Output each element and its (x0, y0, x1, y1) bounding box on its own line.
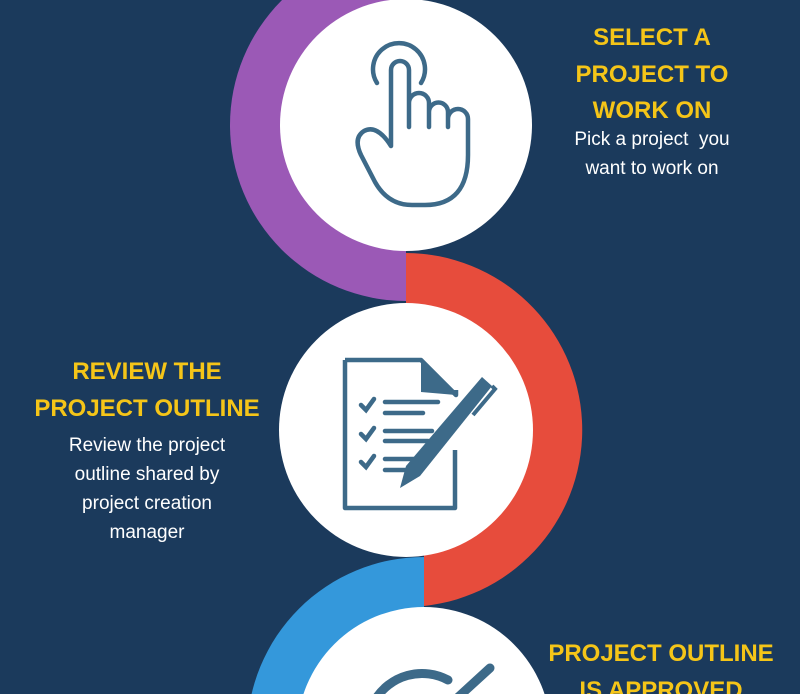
heading: step 1: WORK ON (593, 97, 711, 124)
circle: step 1 (280, 0, 532, 251)
ring: purple (230, 0, 406, 301)
text: step 2 (69, 435, 226, 543)
icon: approved gauge/check (375, 668, 490, 694)
heading: step 2: REVIEW THE (72, 358, 222, 385)
heading: step 3: PROJECT OUTLINE (548, 640, 774, 667)
circle: step 3 (297, 607, 551, 694)
text: step 2: outline shared by (75, 464, 219, 485)
heading: step 1 (576, 24, 728, 124)
ring: blue (247, 557, 424, 694)
text: step 2: Review the project (69, 435, 225, 456)
text: step 2: project creation (82, 493, 212, 514)
text: step 2: manager (110, 522, 184, 543)
text: step 1: want to work on (585, 158, 719, 179)
heading: step 3 (548, 640, 774, 694)
text: step 1 (574, 129, 730, 179)
icon: pointing hand (358, 43, 468, 205)
circle: step 2 (279, 303, 533, 557)
heading: step 1: PROJECT TO (576, 60, 728, 88)
text: step 1: Pick a project you (574, 129, 730, 150)
heading: step 1: SELECT A (593, 24, 711, 51)
ring: red (406, 253, 582, 606)
icon: document with pen (345, 360, 495, 508)
heading: step 2: PROJECT OUTLINE (34, 394, 260, 422)
heading: step 2 (34, 358, 260, 422)
